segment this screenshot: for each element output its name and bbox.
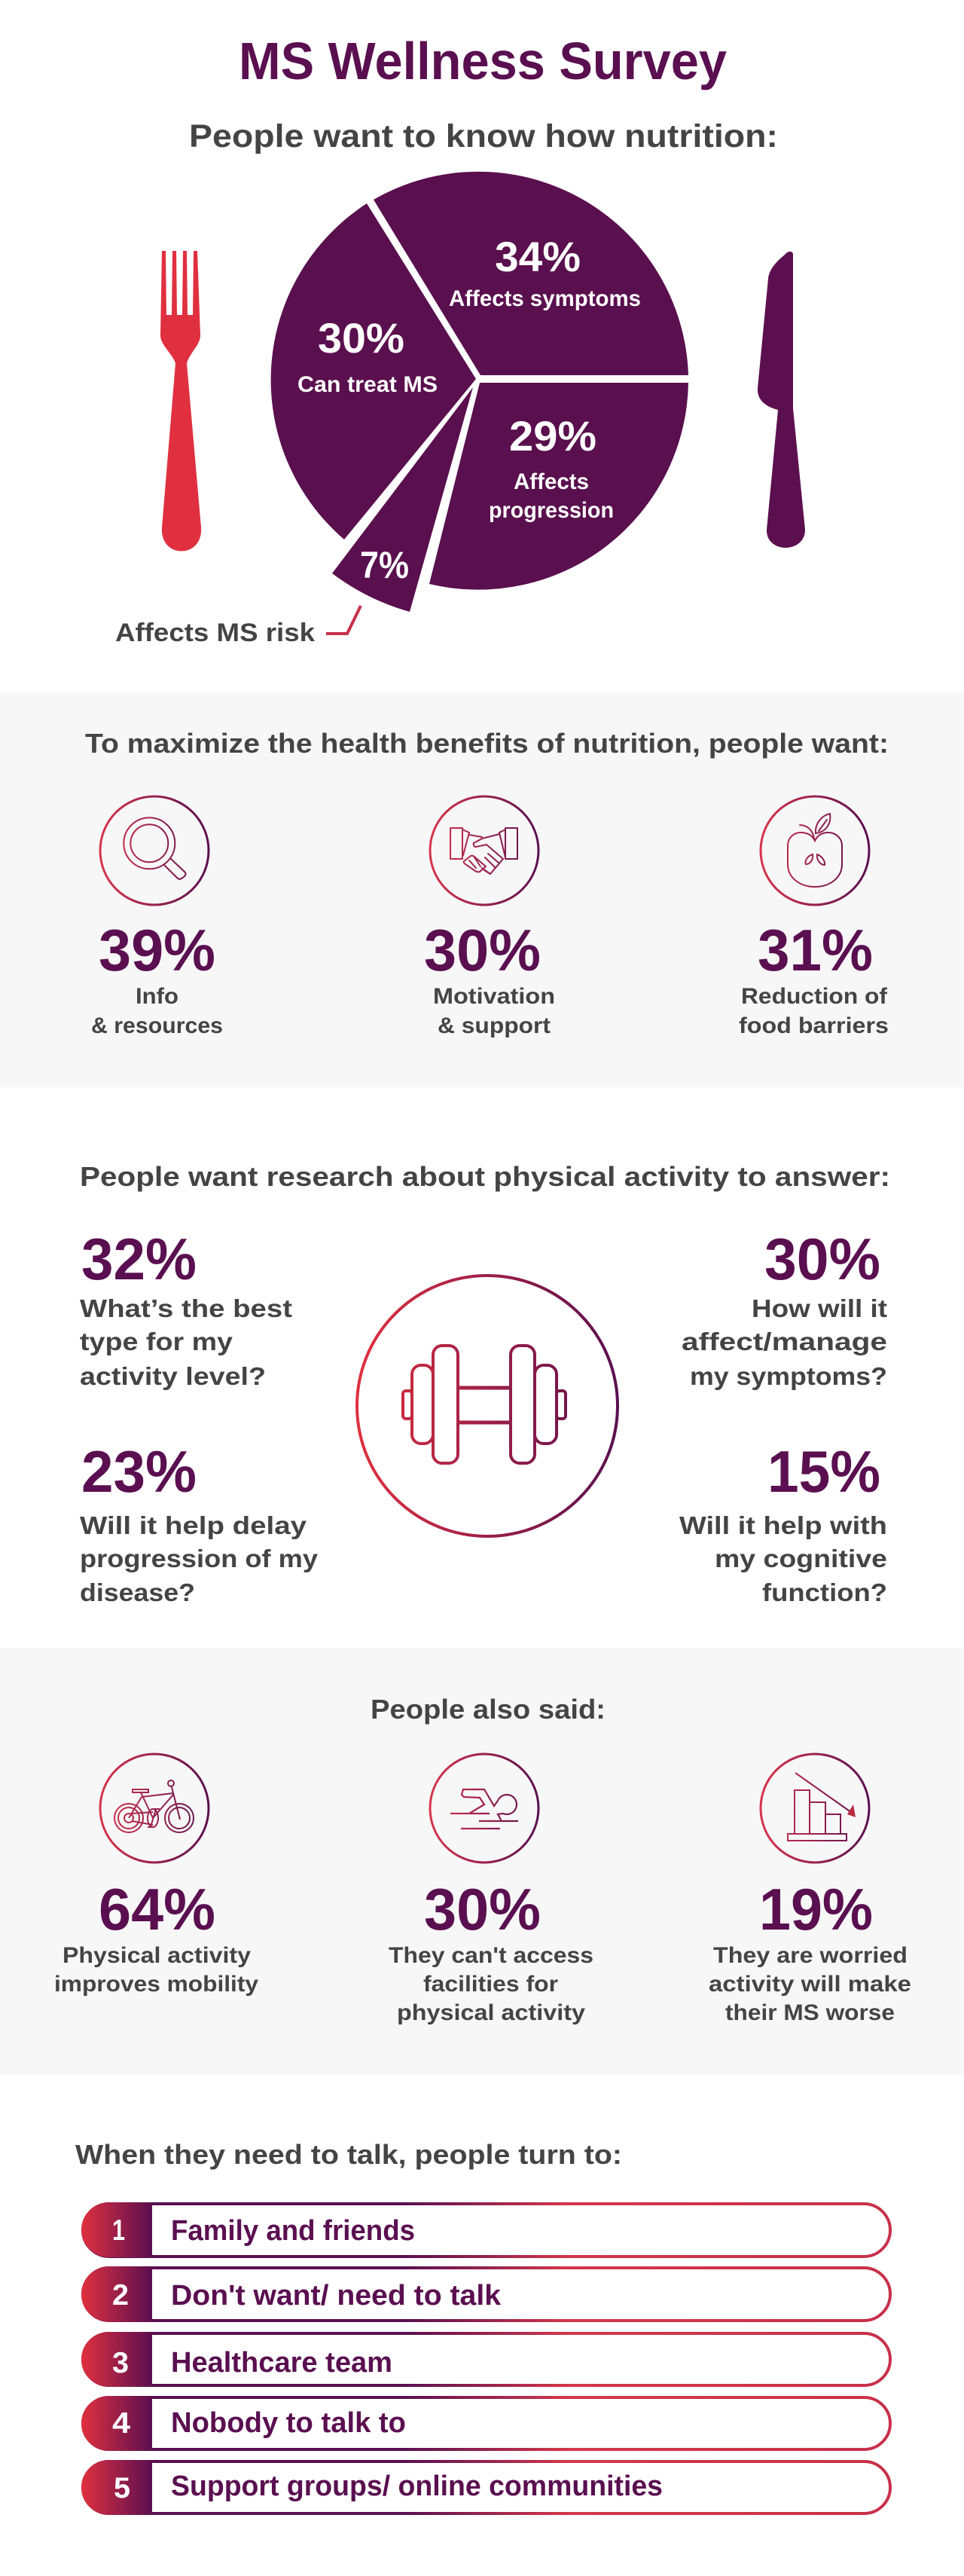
text: symptoms question	[682, 1294, 887, 1390]
list item 2: 2	[112, 2279, 129, 2312]
icon: apple	[761, 796, 869, 905]
panel: people also said	[0, 1648, 964, 2074]
stat: 64%: 64%	[99, 1876, 215, 1942]
label: worried activity will worsen MS: activity will make	[709, 1972, 911, 1997]
heading: People want research about physical activity to answer:	[80, 1161, 890, 1192]
pie label: 7%: 7%	[360, 544, 409, 586]
list item 1: Family and friends	[171, 2215, 415, 2247]
label: reduction of: Reduction of	[741, 984, 888, 1009]
label: and support: & support	[438, 1013, 551, 1038]
label: physical activity improves mobility: improves mobility	[54, 1972, 258, 1997]
text: cognitive question: function?	[762, 1578, 887, 1606]
subtitle: People want to know how nutrition:	[189, 118, 778, 154]
pie label: affects symptoms: Affects symptoms	[449, 286, 641, 311]
text: best type question	[80, 1294, 292, 1390]
text: cognitive question: my cognitive	[715, 1545, 887, 1572]
list item 5: 5	[114, 2472, 130, 2504]
heading: When they need to talk, people turn to:	[75, 2139, 622, 2170]
stat: 32%: 32%	[81, 1226, 197, 1292]
text: symptoms question: my symptoms?	[690, 1362, 887, 1390]
label: can't access facilities: They can't access	[389, 1943, 593, 1968]
pie slice: affects symptoms	[374, 172, 688, 375]
text: symptoms question: How will it	[752, 1294, 887, 1322]
heading: To maximize the health benefits of nutrition, people want:	[85, 728, 889, 759]
icon: dumbbell in circle	[357, 1276, 618, 1536]
label: and resources: & resources	[91, 1013, 223, 1038]
callout: affects MS risk: Affects MS risk	[115, 619, 315, 647]
icon: swimmer	[430, 1754, 538, 1862]
arrow: callout leader	[326, 606, 361, 634]
list item 3	[81, 2332, 890, 2387]
icon: fork	[160, 251, 201, 552]
pie label: can treat MS: Can treat MS	[297, 372, 438, 397]
list item 4	[81, 2396, 890, 2451]
stat: 30%: 30%	[424, 917, 541, 983]
title: MS Wellness Survey	[239, 32, 727, 90]
list item 4: Nobody to talk to	[171, 2407, 406, 2439]
text: best type question: What’s the best	[80, 1294, 292, 1322]
heading: People also said:	[371, 1694, 606, 1725]
label: physical activity improves mobility	[54, 1943, 258, 1997]
pie label: affects: Affects	[514, 469, 589, 494]
stat: 23%: 23%	[81, 1438, 197, 1505]
label: worried activity will worsen MS	[709, 1943, 911, 2025]
label: can't access facilities	[389, 1943, 593, 2025]
panel: physical activity research	[80, 1161, 890, 1606]
icon: magnifying glass	[100, 796, 209, 905]
label: can't access facilities: facilities for	[423, 1972, 558, 1997]
stat: 15%: 15%	[767, 1438, 880, 1505]
icon: knife	[758, 252, 805, 548]
label: worried activity will worsen MS: their MS worse	[725, 2000, 895, 2025]
stat: 19%: 19%	[759, 1876, 873, 1942]
label: can't access facilities: physical activity	[397, 2000, 585, 2025]
stat: 30%: 30%	[424, 1876, 541, 1942]
icon: bicycle	[100, 1754, 209, 1862]
pie slice: affects progression	[429, 383, 688, 590]
list item 3: Healthcare team	[171, 2347, 392, 2379]
text: cognitive question	[679, 1511, 887, 1606]
text: cognitive question: Will it help with	[679, 1511, 887, 1539]
pie label: 30%: 30%	[318, 314, 404, 362]
pie slice: affects MS risk	[332, 387, 473, 612]
label: physical activity improves mobility: Physical activity	[63, 1943, 251, 1968]
panel: who people talk to	[75, 2139, 890, 2515]
list item 5	[81, 2460, 890, 2515]
icon: declining bar chart	[761, 1754, 869, 1862]
list item 2	[81, 2266, 890, 2322]
text: delay progression question: progression of my	[80, 1545, 319, 1572]
pie label: 29%: 29%	[509, 412, 596, 460]
label: motivation: Motivation	[433, 984, 555, 1009]
arrowhead	[847, 1804, 856, 1817]
stat: 39%: 39%	[99, 917, 215, 983]
list item 2: Don't want/ need to talk	[171, 2280, 502, 2312]
label: info: Info	[136, 984, 178, 1009]
text: best type question: type for my	[80, 1328, 233, 1355]
panel: health benefits of nutrition	[0, 692, 964, 1087]
text: best type question: activity level?	[80, 1362, 266, 1390]
list item 5: Support groups/ online communities	[171, 2471, 663, 2502]
list item 1: 1	[112, 2214, 125, 2247]
stat: 30%: 30%	[764, 1226, 880, 1292]
text: symptoms question: affect/manage	[682, 1328, 887, 1355]
pie label: 34%: 34%	[495, 233, 581, 280]
list item 1	[81, 2202, 890, 2257]
list item 3: 3	[112, 2347, 129, 2379]
icon: handshake	[430, 796, 538, 905]
text: delay progression question: Will it help delay	[80, 1511, 307, 1539]
list item 4: 4	[112, 2407, 130, 2440]
pie chart	[271, 172, 688, 612]
pie slice: can treat MS	[271, 203, 476, 539]
text: delay progression question	[80, 1511, 319, 1606]
pie label: progression: progression	[489, 498, 614, 523]
stat: 31%: 31%	[758, 917, 873, 983]
text: delay progression question: disease?	[80, 1578, 195, 1606]
label: worried activity will worsen MS: They are worried	[713, 1943, 908, 1968]
label: food barriers: food barriers	[739, 1013, 889, 1038]
